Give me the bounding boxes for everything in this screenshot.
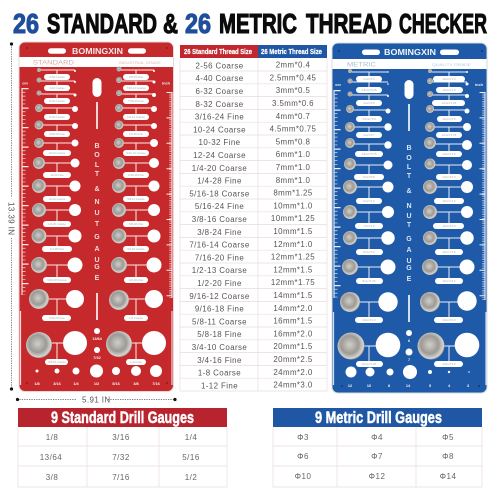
gauge row 1/2-20 Fine xyxy=(114,120,157,137)
metric drill sizes: Φ12 xyxy=(369,472,385,481)
centre slot and bolt and nut gauge lettering: G xyxy=(94,264,100,271)
centre slot and bolt and nut gauge lettering: T xyxy=(407,222,412,229)
drill holes metric: 10 xyxy=(367,384,371,388)
gauge row 5/16-24 Fine: 5/16-24 Fine xyxy=(49,316,65,320)
gauge row 12mm*1.5 xyxy=(426,105,470,122)
gauge row 10-32 Fine xyxy=(33,157,80,178)
gauge row 6-32 Coarse xyxy=(36,90,76,104)
gauge row 6mm*1.0: 6mm*1.0 xyxy=(363,199,375,203)
metric thread sizes: 24mm*3.0 xyxy=(273,381,313,390)
gauge row 5/8-11 Coarse xyxy=(112,179,160,202)
brand name xyxy=(362,47,459,57)
width dimension: 5.91 IN: 5.91 IN xyxy=(82,396,111,404)
gauge row 5mm*0.8 xyxy=(344,158,392,180)
standard thread sizes: 1-12 Fine xyxy=(201,381,238,390)
gauge row 14mm*1.5: 14mm*1.5 xyxy=(443,152,456,156)
centre slot and bolt and nut gauge lettering: L xyxy=(95,162,100,169)
gauge row 24mm*2.0 xyxy=(420,291,477,323)
standard thread sizes: 5/8-18 Fine xyxy=(197,330,242,339)
centre slot and bolt and nut gauge lettering xyxy=(92,78,102,320)
standard drill sizes xyxy=(40,433,200,482)
metric thread sizes: 16mm*1.5 xyxy=(273,317,313,326)
right gauge column xyxy=(418,69,479,367)
drill holes metric: 12 xyxy=(348,384,352,388)
gauge row 10-32 Fine: 10-32 Fine xyxy=(50,173,64,177)
gauge row 8mm*1.0: 8mm*1.0 xyxy=(363,250,375,254)
gauge row 16mm*1.5 xyxy=(423,180,473,204)
gauge row 1/4-20 Coarse xyxy=(32,203,81,227)
drill holes metric: 3 xyxy=(467,384,469,388)
drill holes metric: 7 xyxy=(408,358,410,362)
white header band xyxy=(20,57,173,67)
metric drill sizes: Φ14 xyxy=(440,472,456,481)
gauge row 5/8-18 Fine xyxy=(112,203,160,227)
metric drill sizes xyxy=(295,433,456,481)
centre slot and bolt and nut gauge lettering xyxy=(404,80,414,322)
drill holes standard: 3/8 xyxy=(133,382,139,386)
centre slot and bolt and nut gauge lettering: & xyxy=(406,188,412,195)
metric thread sizes: 10mm*1.25 xyxy=(271,214,315,223)
gauge row 2-56 Coarse xyxy=(37,68,76,80)
standard drill gauges table xyxy=(18,408,227,487)
drill holes standard: 3/16 xyxy=(53,382,61,386)
standard thread sizes: 5/16-24 Fine xyxy=(195,202,244,211)
standard thread sizes: 1/4-28 Fine xyxy=(197,177,242,186)
gauge row 1/2-13 Coarse xyxy=(115,104,157,120)
height dimension: 13.39 IN xyxy=(6,42,16,391)
drill holes metric: 8 xyxy=(388,384,390,388)
white header band: INDUSTRIAL GRADE xyxy=(119,61,162,65)
gauge row 12mm*1.25: 12mm*1.25 xyxy=(442,101,457,105)
gauge row 5/8-18 Fine: 5/8-18 Fine xyxy=(129,222,144,226)
gauge row 8-32 Coarse xyxy=(35,104,78,120)
metric thread sizes: 7mm*1.0 xyxy=(276,163,310,172)
gauge row 7mm*1.0: 7mm*1.0 xyxy=(363,224,375,228)
standard thread sizes: 7/16-14 Coarse xyxy=(189,241,250,250)
standard thread sizes: 2-56 Coarse xyxy=(195,61,244,70)
centre slot and bolt and nut gauge lettering: U xyxy=(406,258,412,265)
drill holes metric: 4 xyxy=(448,384,451,388)
gauge row 10mm*1.5 xyxy=(428,69,468,82)
gauge row 7/16-20 Fine xyxy=(116,90,156,104)
gauge row 4mm*0.7 xyxy=(345,122,392,138)
gauge row 1-8 Coarse xyxy=(109,290,163,321)
centre slot and bolt and nut gauge lettering: N xyxy=(94,199,100,206)
gauge row 12-24 Coarse xyxy=(32,179,80,202)
gauge row 10-24 Coarse xyxy=(34,138,78,156)
gauge row 5mm*0.8: 5mm*0.8 xyxy=(363,175,375,179)
drill holes metric: 6 xyxy=(408,339,410,343)
gauge row 12mm*1.5: 12mm*1.5 xyxy=(443,117,456,121)
gauge row 5/16-18 Coarse: 5/16-18 Coarse xyxy=(47,278,67,282)
title: STANDARD xyxy=(47,8,157,39)
centre slot and bolt and nut gauge lettering: O xyxy=(94,152,100,159)
standard thread sizes: 3/4-10 Coarse xyxy=(192,343,247,352)
inch ruler: inch xyxy=(475,83,484,87)
drill holes standard: 1/2 xyxy=(94,382,99,386)
gauge row 3/16-24 Fine xyxy=(34,120,78,137)
metric thread sizes: 20mm*2.5 xyxy=(273,355,313,364)
standard thread sizes: 3/4-16 Fine xyxy=(197,356,242,365)
drill holes standard: 13/64 xyxy=(92,337,103,341)
thread size table xyxy=(180,45,327,391)
white header band xyxy=(332,59,486,69)
gauge row 3mm*0.5: 3mm*0.5 xyxy=(363,101,375,105)
gauge row 2mm*0.4 xyxy=(348,69,389,82)
standard thread sizes: 3/8-24 Fine xyxy=(197,228,242,237)
gauge row 20mm*1.5 xyxy=(423,231,474,255)
gauge row 6mm*1.0 xyxy=(343,180,394,204)
gauge row 8mm*1.25: 8mm*1.25 xyxy=(363,279,376,283)
standard thread sizes: 12-24 Coarse xyxy=(193,151,246,160)
standard drill sizes: 1/8 xyxy=(46,433,58,442)
gauge row 2mm*0.4: 2mm*0.4 xyxy=(363,77,375,81)
gauge row 20mm*2.5: 20mm*2.5 xyxy=(443,279,456,283)
metric thread sizes: 6mm*1.0 xyxy=(276,150,310,159)
standard drill sizes: 5/16 xyxy=(182,453,200,462)
gauge row 3/4-10 Coarse: 3/4-10 Coarse xyxy=(127,247,145,251)
gauge row 1/4-28 Fine: 1/4-28 Fine xyxy=(50,247,65,251)
gauge row 3/8-16 Coarse: 3/8-16 Coarse xyxy=(48,360,66,364)
table header: 26 Metric Thread Size xyxy=(261,49,322,56)
standard thread sizes: 1/2-20 Fine xyxy=(197,279,242,288)
standard thread sizes: 10-24 Coarse xyxy=(193,125,246,134)
metric drill sizes: Φ6 xyxy=(297,452,309,461)
right gauge column xyxy=(106,66,166,365)
metric thread sizes: 14mm*1.5 xyxy=(273,291,313,300)
gauge row 10-24 Coarse: 10-24 Coarse xyxy=(49,151,66,155)
metric drill sizes: Φ7 xyxy=(371,452,383,461)
gauge row 2-56 Coarse: 2-56 Coarse xyxy=(49,75,65,79)
drill holes standard: 5/16 xyxy=(112,382,120,386)
metric drill sizes: Φ5 xyxy=(442,433,454,442)
brand name xyxy=(48,46,146,56)
gauge row 24mm*2.0: 24mm*2.0 xyxy=(443,318,456,322)
gauge row 12-24 Coarse: 12-24 Coarse xyxy=(49,197,66,201)
gauge row 1-12 Fine: 1-12 Fine xyxy=(130,360,142,364)
gauge row 3/8-24 Fine: 3/8-24 Fine xyxy=(129,75,144,79)
brand name: BOMINGXIN xyxy=(384,47,436,57)
title: METRIC xyxy=(219,8,297,39)
standard thread sizes: 8-32 Coarse xyxy=(195,100,244,109)
metric drill gauges table xyxy=(273,408,482,487)
standard drill sizes: 7/16 xyxy=(112,473,130,482)
gauge row 2.5mm*0.45 xyxy=(348,78,389,93)
gauge row 16mm*2.0: 16mm*2.0 xyxy=(443,224,456,228)
centre slot and bolt and nut gauge lettering: B xyxy=(94,143,100,150)
standard drill sizes: 3/8 xyxy=(46,473,58,482)
metric thread sizes: 12mm*1.75 xyxy=(271,278,315,287)
gauge row 4.5mm*0.75 xyxy=(345,138,392,157)
panel: blue metric gauge xyxy=(332,43,487,393)
title: 26 xyxy=(13,8,39,39)
gauge row 3.5mm*0.6 xyxy=(346,105,390,122)
metric ruler: cm xyxy=(22,82,28,86)
title: 26 xyxy=(185,8,211,39)
standard drill sizes: 1/4 xyxy=(185,433,197,442)
corner screws xyxy=(338,50,483,387)
gauge row 3mm*0.5 xyxy=(348,92,389,106)
metric thread sizes: 10mm*1.0 xyxy=(273,201,313,210)
gauge row 4mm*0.7: 4mm*0.7 xyxy=(363,133,375,137)
gauge row 2.5mm*0.45: 2.5mm*0.45 xyxy=(361,88,377,92)
drill holes standard xyxy=(34,328,162,386)
white header band: QUALITY GRADE xyxy=(432,63,472,67)
standard drill sizes: 7/32 xyxy=(112,453,130,462)
centre slot and bolt and nut gauge lettering: T xyxy=(95,171,100,178)
metric thread sizes: 14mm*2.0 xyxy=(273,304,313,313)
white header band: STANDARD xyxy=(33,60,74,66)
gauge row 20mm*2.5 xyxy=(422,259,474,284)
centre slot and bolt and nut gauge lettering: B xyxy=(406,145,412,152)
gauge row 3/8-24 Fine xyxy=(116,66,155,80)
metric thread sizes: 12mm*1.5 xyxy=(273,265,313,274)
drill holes standard: 1/8 xyxy=(34,382,40,386)
title: THREAD xyxy=(306,8,392,39)
centre slot and bolt and nut gauge lettering: T xyxy=(407,173,412,180)
brand name: BOMINGXIN xyxy=(72,46,123,56)
gauge row 4-40 Coarse: 4-40 Coarse xyxy=(49,86,65,90)
gauge row 3/4-16 Fine: 3/4-16 Fine xyxy=(129,278,144,282)
metric thread sizes: 8mm*1.0 xyxy=(276,176,310,185)
gauge row 7/16-20 Fine: 7/16-20 Fine xyxy=(128,99,144,103)
gauge row 8mm*1.25 xyxy=(342,259,396,284)
standard thread sizes: 10-32 Fine xyxy=(199,138,241,147)
metric thread sizes: 8mm*1.25 xyxy=(273,189,313,198)
gauge row 12mm*1.0 xyxy=(427,78,468,93)
panel: red standard gauge xyxy=(19,42,174,392)
centre slot and bolt and nut gauge lettering: G xyxy=(406,265,412,272)
standard thread sizes: 5/8-11 Coarse xyxy=(192,317,247,326)
metric thread sizes: 3mm*0.5 xyxy=(276,86,310,95)
gauge row 16mm*1.5: 16mm*1.5 xyxy=(443,199,456,203)
gauge row 1/2-20 Fine: 1/2-20 Fine xyxy=(129,132,144,136)
height dimension: 13.39 IN: 13.39 IN xyxy=(6,202,16,235)
gauge row 9/16-18 Fine: 9/16-18 Fine xyxy=(128,173,144,177)
gauge row 5/16-18 Coarse xyxy=(31,257,82,283)
gauge row 3/16-24 Fine: 3/16-24 Fine xyxy=(49,132,65,136)
inch ruler xyxy=(20,82,172,385)
metric ruler: cm xyxy=(335,83,341,87)
centre slot and bolt and nut gauge lettering: T xyxy=(95,221,100,228)
standard thread sizes: 5/16-18 Coarse xyxy=(189,189,250,198)
table header: 26 Standard Thread Size xyxy=(184,49,252,56)
metric thread sizes: 2.5mm*0.45 xyxy=(270,73,317,82)
standard thread sizes: 3/8-16 Coarse xyxy=(192,215,247,224)
standard drill sizes: 3/16 xyxy=(112,433,130,442)
standard thread sizes: 9/16-18 Fine xyxy=(195,305,244,314)
metric thread sizes: 12mm*1.0 xyxy=(273,240,313,249)
centre slot and bolt and nut gauge lettering: A xyxy=(94,246,100,253)
gauge row 12mm*1.0: 12mm*1.0 xyxy=(443,88,456,92)
centre slot and bolt and nut gauge lettering: U xyxy=(406,213,412,220)
standard thread sizes: 4-40 Coarse xyxy=(195,74,244,83)
drill holes metric xyxy=(346,330,470,388)
gauge row 3/4-10 Coarse xyxy=(112,228,160,252)
gauge row 10mm*1.5: 10mm*1.5 xyxy=(443,77,456,81)
table heading: 9 Standard Drill Gauges xyxy=(51,409,194,427)
inch ruler: inch xyxy=(162,82,171,86)
gauge row 3/8-16 Coarse xyxy=(26,331,87,365)
gauge row 7/16-14 Coarse xyxy=(116,77,156,91)
gauge row 12mm*1.75: 12mm*1.75 xyxy=(442,133,457,137)
gauge row 1/4-28 Fine xyxy=(32,228,82,252)
metric drill sizes: Φ10 xyxy=(295,472,311,481)
standard thread sizes: 3/16-24 Fine xyxy=(195,113,244,122)
centre slot and bolt and nut gauge lettering: G xyxy=(94,234,100,241)
table heading: 9 Metric Drill Gauges xyxy=(315,409,442,427)
gauge row 10mm*1.25: 10mm*1.25 xyxy=(362,362,377,366)
drill holes metric: 14 xyxy=(406,384,411,388)
metric thread sizes: 5mm*0.8 xyxy=(276,137,310,146)
metric drill sizes: Φ3 xyxy=(297,433,309,442)
standard thread sizes xyxy=(189,61,250,390)
gauge row 10mm*1.25 xyxy=(338,332,400,367)
gauge row 12mm*1.75 xyxy=(425,122,471,138)
standard thread sizes: 1-8 Coarse xyxy=(198,369,241,378)
standard drill sizes: 13/64 xyxy=(40,453,62,462)
gauge row 14mm*2.0: 14mm*2.0 xyxy=(443,175,456,179)
metric thread sizes: 16mm*2.0 xyxy=(273,329,313,338)
gauge row 24mm*3.0 xyxy=(418,332,479,367)
gauge row 10mm*1.0: 10mm*1.0 xyxy=(363,318,376,322)
width dimension: 5.91 IN xyxy=(16,396,177,404)
gauge row 5/8-11 Coarse: 5/8-11 Coarse xyxy=(127,197,145,201)
gauge row 9/16-12 Coarse: 9/16-12 Coarse xyxy=(126,151,146,155)
standard thread sizes: 9/16-12 Coarse xyxy=(189,292,250,301)
gauge row 6-32 Coarse: 6-32 Coarse xyxy=(49,99,65,103)
metric thread sizes: 12mm*1.25 xyxy=(271,253,315,262)
gauge row 8mm*1.0 xyxy=(343,231,395,255)
title xyxy=(13,8,487,39)
standard thread sizes: 1/2-13 Coarse xyxy=(192,266,247,275)
standard drill sizes: 1/2 xyxy=(185,473,197,482)
metric thread sizes: 10mm*1.5 xyxy=(273,227,313,236)
centre slot and bolt and nut gauge lettering: U xyxy=(94,210,100,217)
title: & xyxy=(163,8,178,39)
gauge row 8-32 Coarse: 8-32 Coarse xyxy=(49,115,65,119)
gauge row 4.5mm*0.75: 4.5mm*0.75 xyxy=(361,152,377,156)
centre slot and bolt and nut gauge lettering: O xyxy=(406,155,412,162)
centre slot and bolt and nut gauge lettering: U xyxy=(94,257,100,264)
gauge row 14mm*1.5 xyxy=(424,137,472,157)
metric thread sizes: 20mm*1.5 xyxy=(273,342,313,351)
centre slot and bolt and nut gauge lettering: & xyxy=(94,186,100,193)
gauge row 7mm*1.0 xyxy=(343,205,394,229)
centre slot and bolt and nut gauge lettering: A xyxy=(406,247,412,254)
corner screws xyxy=(26,47,168,384)
gauge row 20mm*1.5: 20mm*1.5 xyxy=(443,250,456,254)
standard thread sizes: 6-32 Coarse xyxy=(195,87,244,96)
gauge row 1-12 Fine xyxy=(106,331,166,365)
gauge row 1/4-20 Coarse: 1/4-20 Coarse xyxy=(48,222,66,226)
left gauge column xyxy=(26,68,87,365)
metric thread sizes xyxy=(270,61,317,390)
gauge row 10mm*1.0 xyxy=(340,292,398,323)
centre slot and bolt and nut gauge lettering: G xyxy=(406,236,412,243)
white header band: METRIC xyxy=(347,62,376,68)
gauge row 9/16-18 Fine xyxy=(113,157,159,178)
centre slot and bolt and nut gauge lettering: E xyxy=(95,275,100,282)
gauge row 12mm*1.25 xyxy=(427,91,469,106)
metric thread sizes: 3.5mm*0.6 xyxy=(272,99,314,108)
metric thread sizes: 4mm*0.7 xyxy=(276,112,310,121)
metric thread sizes: 2mm*0.4 xyxy=(276,61,310,70)
standard thread sizes: 7/16-20 Fine xyxy=(195,253,244,262)
drill holes metric: 5 xyxy=(429,384,431,388)
centre slot and bolt and nut gauge lettering: E xyxy=(407,276,412,283)
gauge row 1/2-13 Coarse: 1/2-13 Coarse xyxy=(127,115,145,119)
standard thread sizes: 1/4-20 Coarse xyxy=(192,164,247,173)
gauge row 5/16-24 Fine xyxy=(29,289,84,321)
gauge row 9/16-12 Coarse xyxy=(114,138,158,156)
metric drill sizes: Φ8 xyxy=(442,452,454,461)
metric thread sizes: 4.5mm*0.75 xyxy=(270,125,317,134)
gauge row 16mm*2.0 xyxy=(423,205,473,229)
gauge row 14mm*2.0 xyxy=(424,158,472,180)
metric thread sizes: 24mm*2.0 xyxy=(273,368,313,377)
gauge row 7/16-14 Coarse: 7/16-14 Coarse xyxy=(126,86,146,90)
drill holes standard: 1/4 xyxy=(73,382,80,386)
left gauge column xyxy=(338,69,400,367)
drill holes standard: 7/32 xyxy=(93,356,101,360)
gauge row 3.5mm*0.6: 3.5mm*0.6 xyxy=(362,117,376,121)
table header xyxy=(180,45,327,58)
gauge row 1-8 Coarse: 1-8 Coarse xyxy=(129,316,143,320)
metric drill sizes: Φ4 xyxy=(371,433,383,442)
centre slot and bolt and nut gauge lettering: N xyxy=(406,203,412,210)
gauge row 3/4-16 Fine xyxy=(111,257,162,283)
gauge row 4-40 Coarse xyxy=(36,78,76,91)
centre slot and bolt and nut gauge lettering: L xyxy=(407,164,412,171)
inch ruler xyxy=(334,83,486,385)
gauge row 24mm*3.0: 24mm*3.0 xyxy=(443,362,456,366)
drill holes standard: 7/16 xyxy=(152,382,160,386)
